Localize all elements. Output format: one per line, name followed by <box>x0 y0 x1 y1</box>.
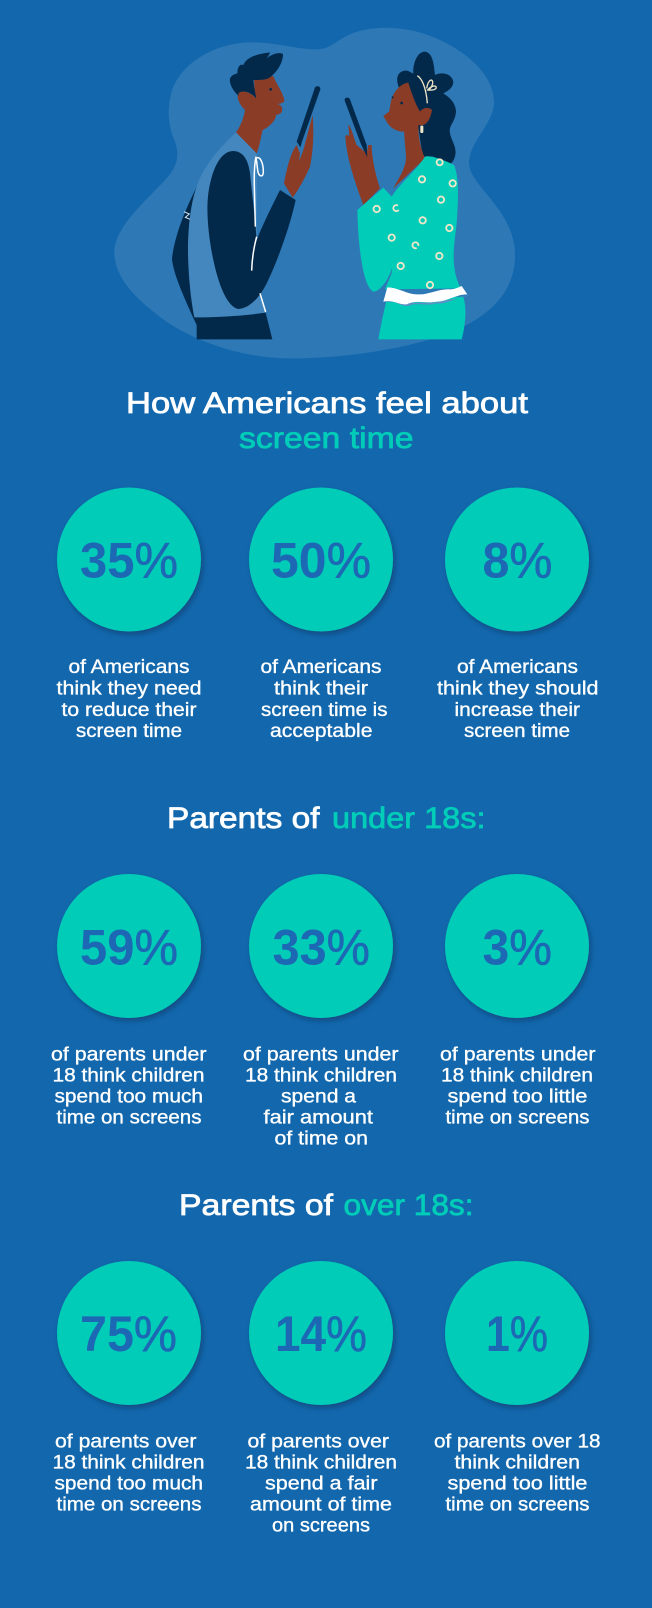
stat: 59%: spend too much <box>54 1086 203 1108</box>
stat: 3%: spend too little <box>448 1086 588 1108</box>
stat: 35%: of Americans <box>68 656 190 678</box>
man <box>172 52 320 339</box>
stat: 33%: 33% <box>272 920 370 976</box>
stat: 1%: time on screens <box>446 1494 590 1516</box>
stat: 3%: 3% <box>482 920 552 976</box>
stat: 59%: 18 think children <box>52 1065 204 1087</box>
stat: 33%: 18 think children <box>245 1065 397 1087</box>
stat: 59%: 59% <box>80 920 178 976</box>
stat: 33%: of parents under <box>243 1044 399 1066</box>
stat: 59% <box>51 874 207 1128</box>
background blob <box>114 28 515 358</box>
stat: 33% <box>243 874 399 1149</box>
panel: parents of under 18s statistics <box>51 874 596 1149</box>
stat: 75%: of parents over <box>55 1431 197 1453</box>
stat: 14%: 14% <box>275 1306 367 1362</box>
stat: 50%: screen time is <box>261 699 388 721</box>
stat: 50%: acceptable <box>270 720 372 742</box>
illustration: two people looking at phones <box>114 28 515 358</box>
stat: 50% <box>249 488 393 742</box>
heading: parents of over 18s: Parents of <box>179 1189 334 1222</box>
panel: all Americans statistics <box>56 488 598 742</box>
stat: 8%: increase their <box>454 699 581 721</box>
stat: 59%: of parents under <box>51 1044 207 1066</box>
heading: parents of under 18s: under 18s: <box>332 802 486 835</box>
stat: 14%: on screens <box>272 1515 370 1537</box>
woman <box>345 52 469 339</box>
stat: 8% <box>437 488 598 742</box>
stat: 8%: screen time <box>464 720 570 742</box>
stat: 33%: fair amount <box>264 1106 374 1128</box>
stat: 1%: of parents over 18 <box>434 1431 600 1453</box>
stat: 59%: time on screens <box>56 1106 202 1128</box>
stat: 50%: think their <box>274 678 369 700</box>
stat: 14%: of parents over <box>248 1431 390 1453</box>
stat: 75%: spend too much <box>54 1473 203 1495</box>
stat: 1%: spend too little <box>448 1473 588 1495</box>
stat: 3% <box>440 874 596 1128</box>
heading: parents of over 18s: over 18s: <box>344 1189 474 1222</box>
title: How Americans feel about <box>126 387 529 420</box>
stat: 35%: think they need <box>56 678 202 700</box>
heading: parents of over 18s <box>179 1189 474 1222</box>
title <box>126 387 529 455</box>
stat: 75%: time on screens <box>56 1494 202 1516</box>
stat: 1% <box>434 1261 600 1516</box>
stat: 14%: spend a fair <box>265 1473 378 1495</box>
title: screen time <box>239 422 414 455</box>
stat: 75% <box>52 1261 204 1516</box>
stat: 1%: think children <box>454 1451 580 1473</box>
stat: 14%: 18 think children <box>245 1451 397 1473</box>
stat: 35% <box>56 488 202 742</box>
stat: 8%: think they should <box>437 678 598 700</box>
stat: 33%: spend a <box>281 1086 356 1108</box>
stat: 75%: 18 think children <box>52 1451 204 1473</box>
stat: 14% <box>245 1261 397 1537</box>
stat: 35%: screen time <box>76 720 182 742</box>
heading: parents of under 18s: Parents of <box>167 802 320 835</box>
stat: 3%: of parents under <box>440 1044 596 1066</box>
stat: 1%: 1% <box>486 1306 548 1362</box>
stat: 14%: amount of time <box>250 1494 392 1516</box>
heading: parents of under 18s <box>167 802 486 835</box>
stat: 50%: 50% <box>271 532 371 588</box>
panel: parents of over 18s statistics <box>52 1261 600 1537</box>
stat: 3%: time on screens <box>446 1106 590 1128</box>
stat: 50%: of Americans <box>260 656 382 678</box>
stat: 33%: of time on <box>274 1127 368 1149</box>
stat: 8%: 8% <box>482 532 552 588</box>
stat: 75%: 75% <box>80 1306 177 1362</box>
stat: 3%: 18 think children <box>441 1065 593 1087</box>
stat: 8%: of Americans <box>457 656 578 678</box>
stat: 35%: 35% <box>80 532 178 588</box>
stat: 35%: to reduce their <box>62 699 197 721</box>
